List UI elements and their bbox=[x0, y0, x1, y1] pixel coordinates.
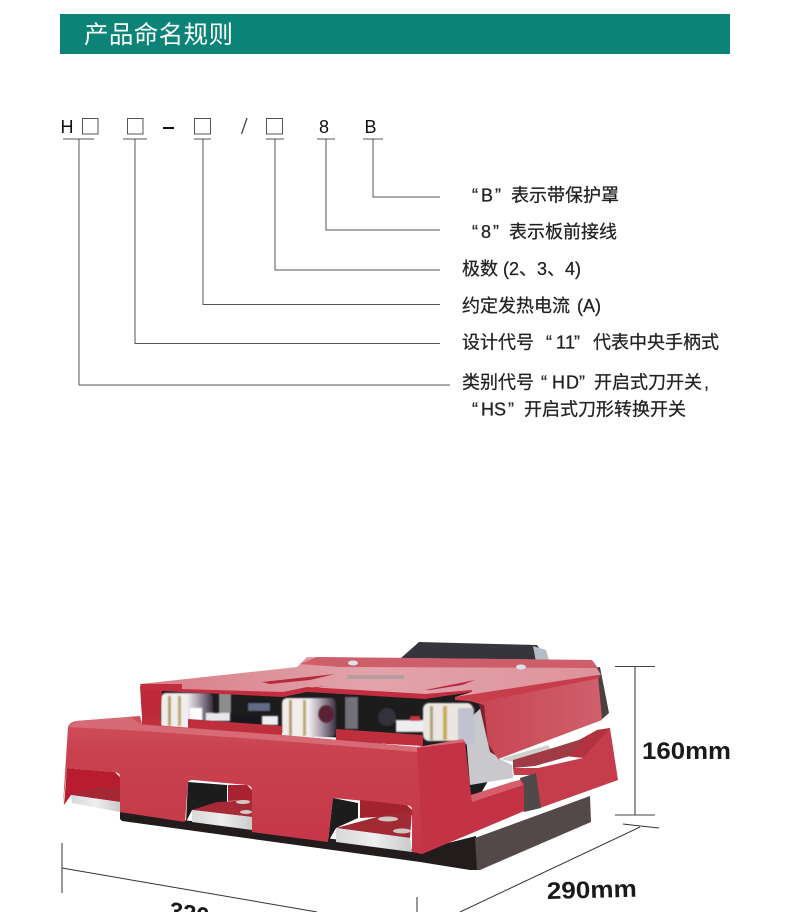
dimension: width 320mm bbox=[62, 843, 417, 912]
model code symbols bbox=[60, 117, 377, 137]
code descriptions: 类别代号 bbox=[462, 372, 534, 392]
code descriptions: “B” bbox=[472, 186, 501, 206]
centre terminal bar bbox=[186, 782, 252, 830]
code descriptions: “HD” bbox=[541, 372, 585, 392]
inner red strip bbox=[142, 716, 162, 727]
contact 3 bbox=[423, 703, 474, 744]
lower right red guard bbox=[513, 728, 618, 808]
height label: 160mm bbox=[642, 738, 731, 765]
contact 1 bbox=[161, 693, 213, 728]
code descriptions bbox=[462, 186, 719, 420]
top plate bbox=[140, 657, 601, 697]
right terminal bar bbox=[328, 798, 412, 852]
code descriptions: 代表中央手柄式 bbox=[593, 332, 719, 352]
front red housing bbox=[63, 716, 524, 854]
model code symbols: H bbox=[60, 117, 74, 137]
contact 2 bbox=[282, 698, 336, 737]
model code symbols: 8 bbox=[319, 117, 329, 137]
dark base bbox=[120, 812, 480, 870]
interior mechanism bbox=[158, 690, 500, 795]
code descriptions: “HS” bbox=[472, 400, 514, 420]
rear dark block bbox=[590, 667, 609, 720]
code descriptions: 表示带保护罩 bbox=[511, 186, 619, 206]
right side panel bbox=[455, 675, 602, 759]
code descriptions: 表示板前接线 bbox=[509, 222, 617, 242]
code descriptions: “ bbox=[546, 332, 552, 352]
left inner cover wall bbox=[140, 686, 162, 718]
code descriptions: 开启式刀开关 bbox=[594, 372, 702, 392]
code descriptions: 开启式刀形转换开关 bbox=[524, 400, 686, 420]
product photo: red switch bbox=[63, 642, 618, 870]
code descriptions: 极数 bbox=[462, 259, 498, 279]
code descriptions: 1 bbox=[565, 332, 575, 352]
code descriptions: , bbox=[704, 372, 709, 392]
code descriptions: 约定发热电流 bbox=[462, 296, 570, 316]
depth label: 290mm bbox=[546, 876, 637, 905]
title banner bbox=[60, 14, 730, 54]
contact assemblies bbox=[161, 691, 474, 744]
code descriptions: “8” bbox=[472, 222, 499, 242]
code descriptions: (2、3、4) bbox=[503, 259, 581, 279]
black handle bbox=[401, 642, 548, 672]
leader lines connecting code symbols to descriptions bbox=[63, 139, 450, 385]
model code symbols: B bbox=[364, 117, 377, 137]
title text: 产品命名规则 bbox=[84, 21, 233, 49]
code descriptions: ” bbox=[574, 332, 580, 352]
dimension: depth 290mm bbox=[460, 824, 659, 912]
dimension: height 160mm bbox=[615, 666, 731, 815]
code descriptions: (A) bbox=[577, 296, 601, 316]
screw holes bbox=[348, 660, 358, 666]
left terminal bar bbox=[64, 768, 120, 812]
code descriptions: 设计代号 bbox=[462, 332, 534, 352]
code descriptions: 1 bbox=[556, 332, 566, 352]
